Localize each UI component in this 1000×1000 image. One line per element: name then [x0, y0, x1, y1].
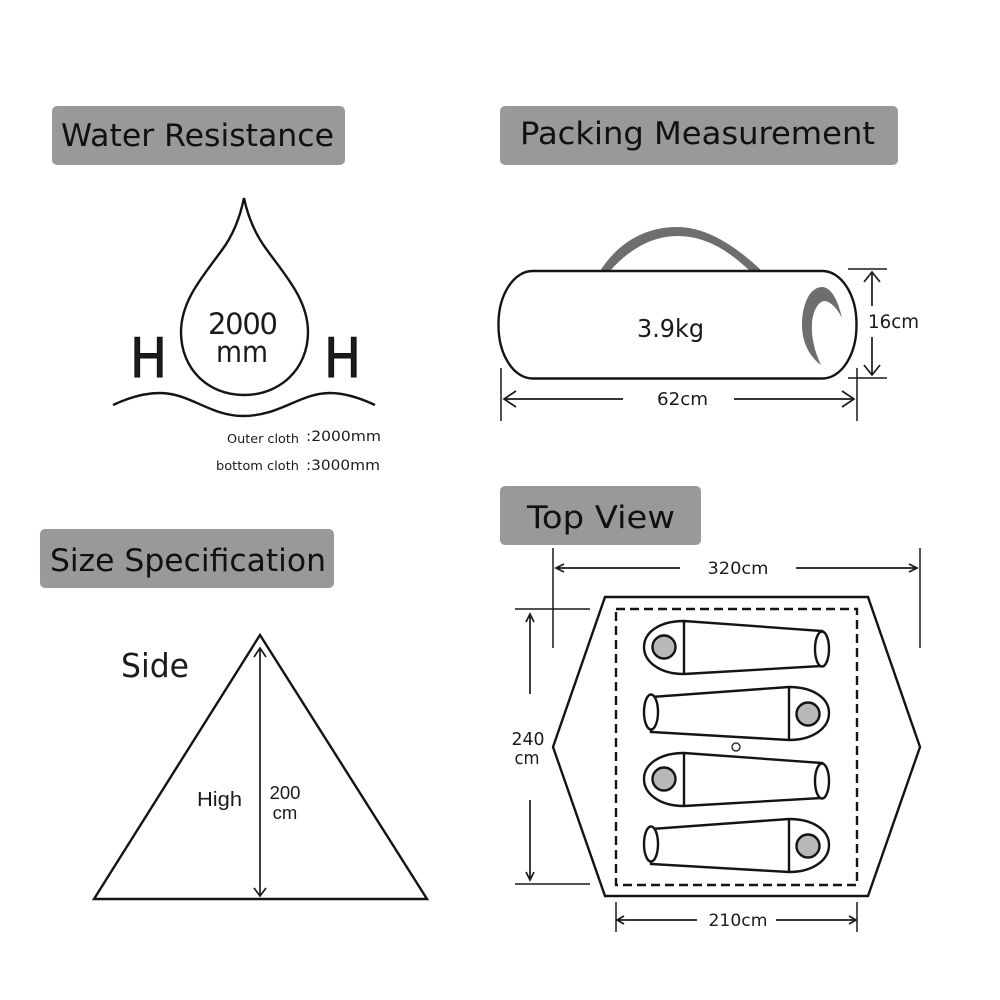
- height value: [270, 782, 300, 823]
- icon: water drop: [181, 198, 308, 395]
- sleeping bag 4: [644, 819, 829, 872]
- dimension: bag diameter: [848, 269, 919, 378]
- bag handle: [600, 227, 762, 271]
- heading: Water Resistance: [52, 106, 345, 165]
- dimension: bag diameter: 16cm: [868, 311, 919, 333]
- drop value: [208, 307, 278, 369]
- dimension: overall width: 320cm: [708, 559, 768, 579]
- sleeping bag 1: [644, 621, 829, 674]
- dimension: inner width: 210cm: [708, 911, 768, 931]
- height value: cm: [273, 802, 297, 823]
- sleeping bag 3: [644, 753, 829, 806]
- panel: size specification: [40, 529, 427, 899]
- dimension: depth: cm: [514, 748, 540, 769]
- water wave: [113, 393, 375, 416]
- bottom cloth rating: :3000mm: [306, 458, 380, 474]
- drop value: 2000: [208, 307, 278, 341]
- outer cloth rating: [227, 429, 381, 446]
- centre pole: [732, 743, 740, 751]
- dimension: overall width: [553, 548, 920, 648]
- heading: Packing Measurement: [500, 106, 898, 165]
- outer cloth rating: :2000mm: [306, 429, 381, 445]
- high label: High: [197, 788, 242, 811]
- heading: Size Specification: [40, 529, 334, 588]
- bottom cloth rating: bottom cloth: [216, 458, 299, 473]
- right H: H: [324, 327, 361, 390]
- panel: water resistance: [52, 106, 381, 474]
- heading: Top View: [500, 486, 701, 545]
- carry bag: [498, 271, 856, 378]
- bottom cloth rating: [216, 458, 380, 474]
- height arrow: [254, 648, 266, 896]
- dimension: bag length: 62cm: [657, 389, 708, 410]
- bag end crescent: [802, 287, 842, 365]
- dimension: depth: 240: [512, 729, 544, 750]
- dimension: depth: [512, 609, 590, 884]
- heading: Size Specification: Size Specification: [50, 543, 326, 579]
- heading: Water Resistance: Water Resistance: [61, 118, 334, 154]
- dimension: bag length: [501, 368, 857, 421]
- sleeping bag 2: [644, 687, 829, 740]
- tent side triangle: [94, 635, 427, 899]
- panel: top view: [500, 486, 920, 932]
- left H: H: [130, 327, 167, 390]
- panel: packing measurement: [498, 106, 919, 421]
- bag weight: 3.9kg: [637, 314, 704, 343]
- drop value: mm: [216, 335, 268, 369]
- inner tent dashed outline: [616, 609, 857, 885]
- tent footprint: [553, 597, 920, 896]
- heading: Top View: Top View: [526, 500, 675, 536]
- dimension: inner width: [616, 902, 857, 932]
- height value: 200: [270, 782, 300, 803]
- outer cloth rating: Outer cloth: [227, 431, 299, 446]
- side label: Side: [121, 646, 189, 685]
- heading: Packing Measurement: Packing Measurement: [520, 116, 875, 152]
